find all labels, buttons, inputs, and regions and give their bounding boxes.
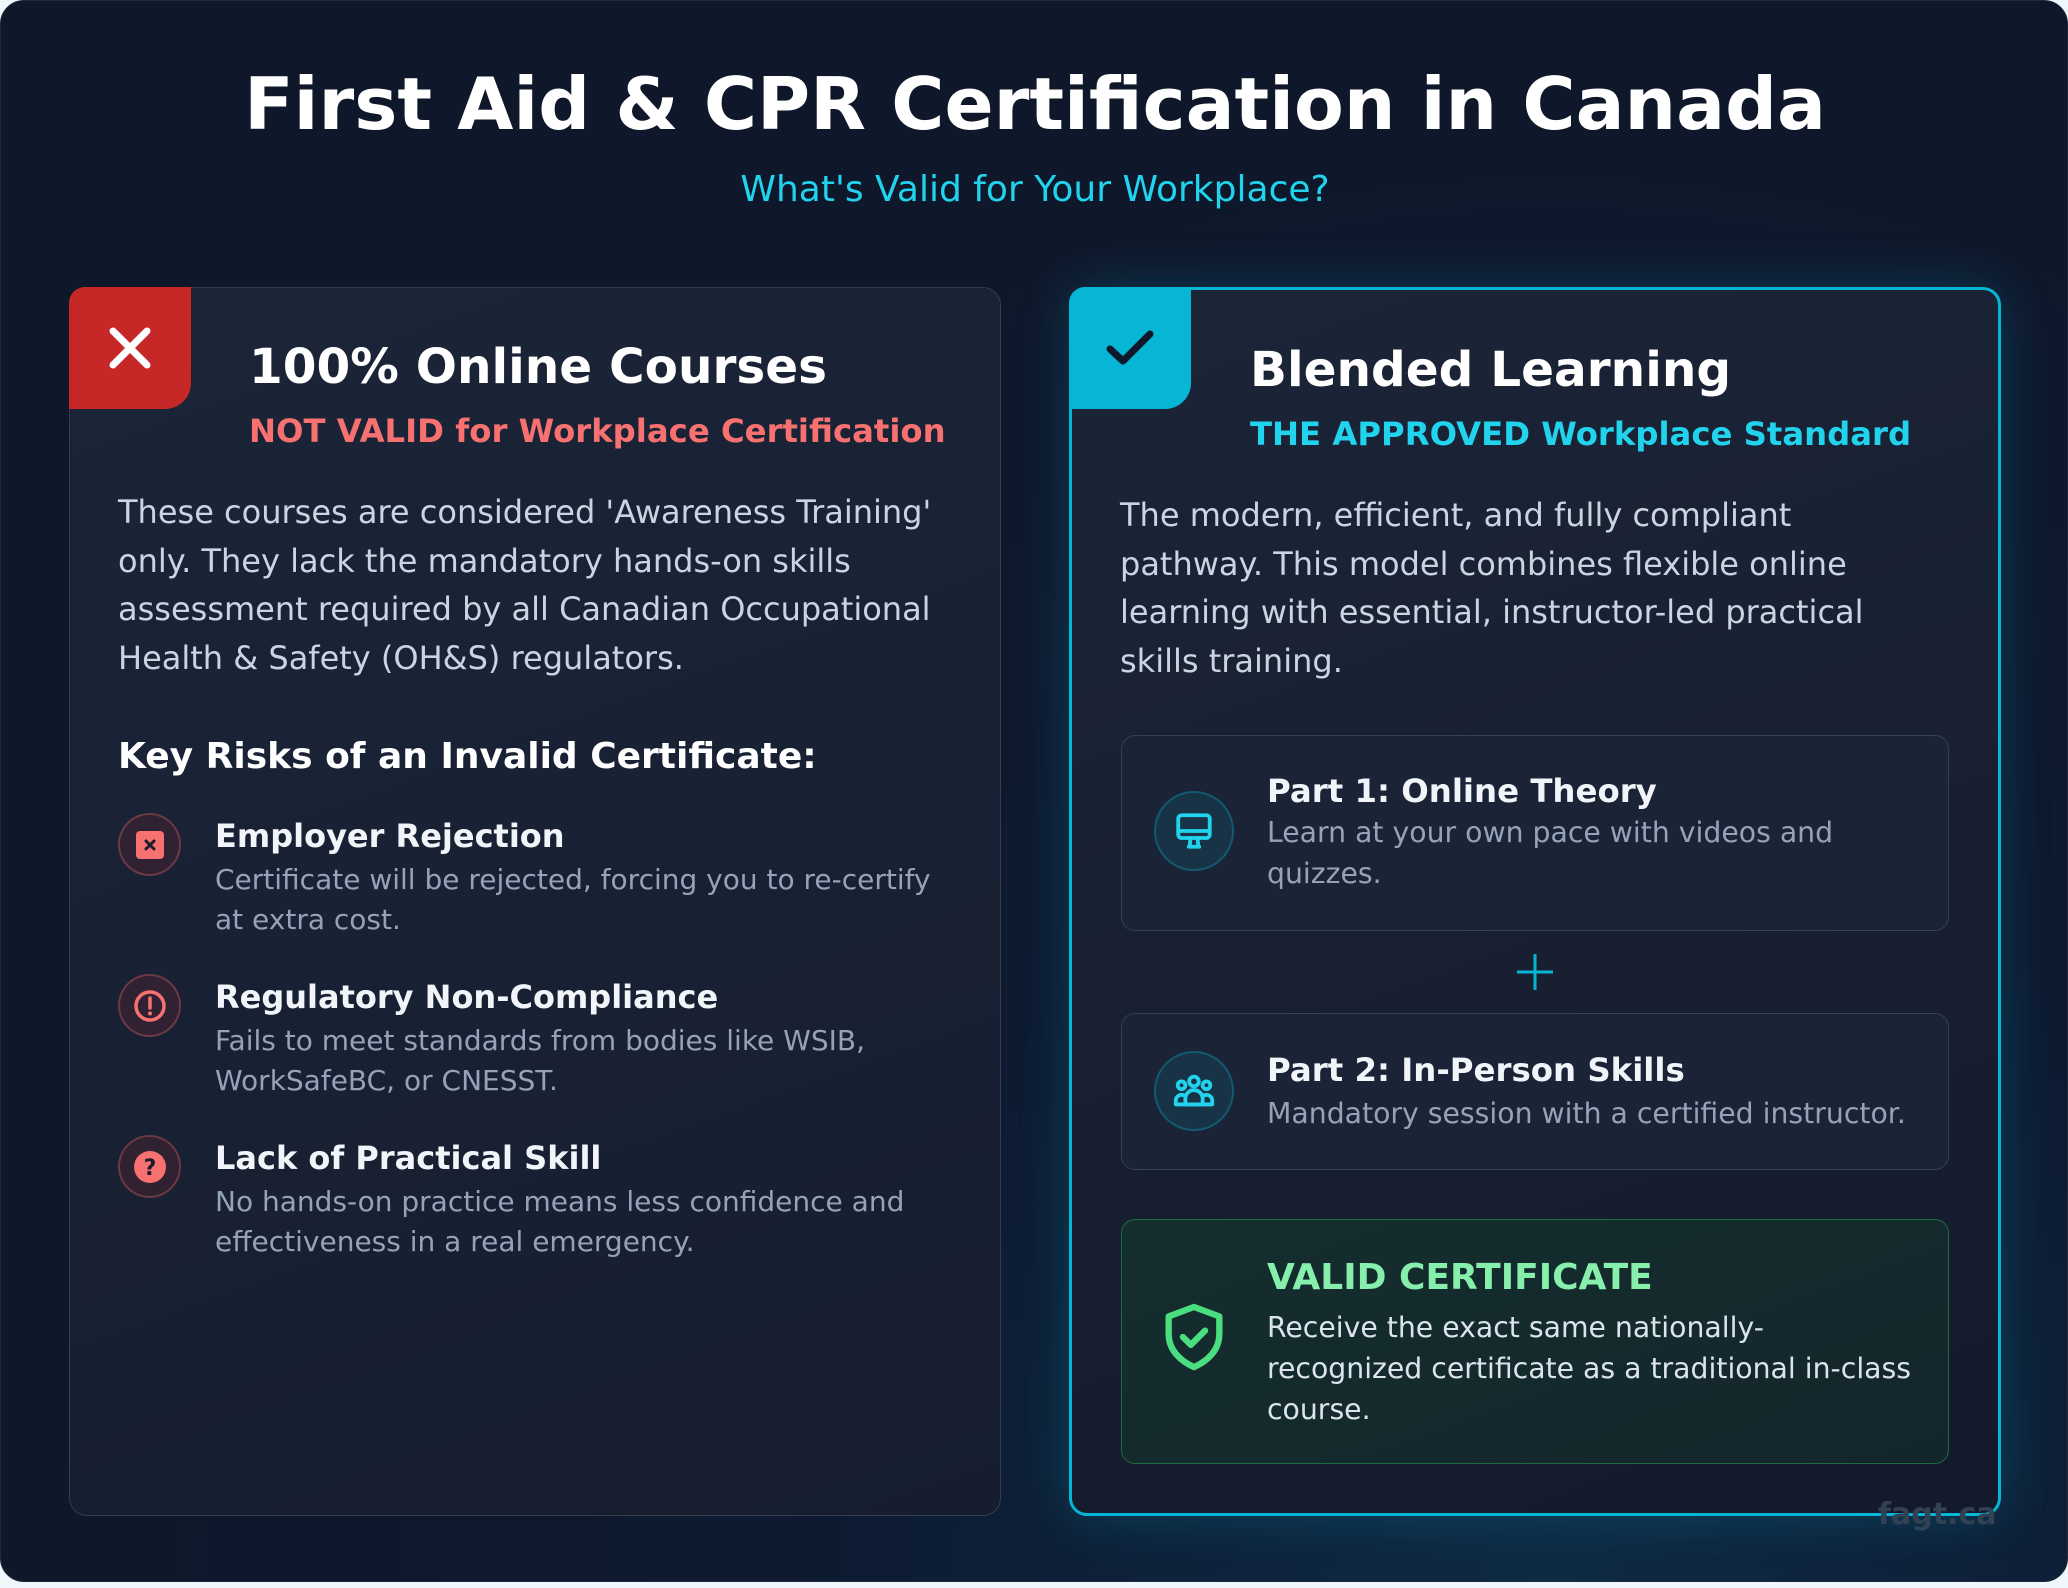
heading: blended: Blended Learning — [1250, 342, 1731, 398]
risk: non-compliance: Regulatory Non-Compliance — [215, 978, 718, 1016]
text: blended description: pathway. This model combines flexible online — [1120, 544, 1847, 582]
risk: lack of skill: No hands-on practice means less confidence and — [215, 1185, 904, 1218]
text: part 1: Part 1: Online Theory — [1267, 772, 1657, 810]
text: valid certificate: recognized certificate as a traditional in-class — [1267, 1352, 1911, 1385]
heading: online: 100% Online Courses — [249, 339, 827, 395]
box: valid certificate — [1121, 1219, 1949, 1464]
risk: employer rejection: Certificate will be rejected, forcing you to re-certify — [215, 863, 931, 896]
risk: lack of skill: Lack of Practical Skill — [215, 1139, 601, 1177]
text: part 2: Part 2: In-Person Skills — [1267, 1051, 1685, 1089]
icon: lack of skill: ? — [143, 1156, 156, 1180]
icon: plus — [1517, 954, 1553, 990]
panel: blended learning — [1069, 287, 2001, 1516]
icon: shield — [1166, 1304, 1222, 1370]
text: valid certificate — [1267, 1257, 1911, 1426]
risk: employer rejection — [215, 817, 931, 936]
watermark: fagt.ca — [1878, 1497, 1997, 1532]
icon: monitor — [1154, 791, 1234, 871]
risk: employer rejection: at extra cost. — [215, 903, 401, 936]
text: online description: These courses are considered 'Awareness Training' — [118, 493, 931, 531]
text: online description — [118, 493, 931, 676]
box: part 1 online theory — [1121, 735, 1949, 931]
text: blended description — [1120, 496, 1864, 680]
text: part 1 — [1267, 772, 1833, 890]
text: online description: Health & Safety (OH&S) regulators. — [118, 638, 684, 676]
badge: red x — [69, 287, 191, 409]
text: blended description: learning with essential, instructor-led practical — [1120, 593, 1864, 631]
text: part 1: Learn at your own pace with videos and — [1267, 816, 1833, 849]
subheading: approved: THE APPROVED Workplace Standard — [1250, 415, 1911, 453]
text: valid certificate: course. — [1267, 1393, 1371, 1426]
badge: cyan check — [1069, 287, 1191, 409]
icon: lack of skill — [118, 1135, 181, 1198]
risk: non-compliance: WorkSafeBC, or CNESST. — [215, 1064, 558, 1097]
text: online description: only. They lack the mandatory hands-on skills — [118, 542, 851, 580]
text: blended description: skills training. — [1120, 642, 1343, 680]
risk: lack of skill — [215, 1139, 904, 1258]
text: part 2: Mandatory session with a certified instructor. — [1267, 1097, 1906, 1130]
risk: non-compliance: Fails to meet standards from bodies like WSIB, — [215, 1024, 865, 1057]
text: valid certificate: Receive the exact same nationally- — [1267, 1311, 1764, 1344]
icon: employer rejection — [118, 813, 181, 876]
icon: non-compliance — [118, 974, 181, 1037]
risk: lack of skill: effectiveness in a real emergency. — [215, 1225, 695, 1258]
panel: 100% online courses — [69, 287, 1001, 1516]
risk: employer rejection: Employer Rejection — [215, 817, 565, 855]
subheading: not valid: NOT VALID for Workplace Certification — [249, 412, 946, 450]
text: online description: assessment required by all Canadian Occupational — [118, 590, 931, 628]
title: First Aid & CPR Certification in Canada — [244, 63, 1826, 147]
box: part 2 in-person — [1121, 1013, 1949, 1170]
text: part 2 — [1267, 1051, 1906, 1130]
icon: group — [1154, 1051, 1234, 1131]
text: part 1: quizzes. — [1267, 857, 1382, 890]
heading: key risks: Key Risks of an Invalid Certificate: — [118, 736, 817, 777]
text: blended description: The modern, efficient, and fully compliant — [1120, 496, 1791, 534]
subtitle: What's Valid for Your Workplace? — [740, 169, 1330, 210]
text: valid certificate: VALID CERTIFICATE — [1267, 1257, 1653, 1298]
risk: non-compliance — [215, 978, 865, 1097]
